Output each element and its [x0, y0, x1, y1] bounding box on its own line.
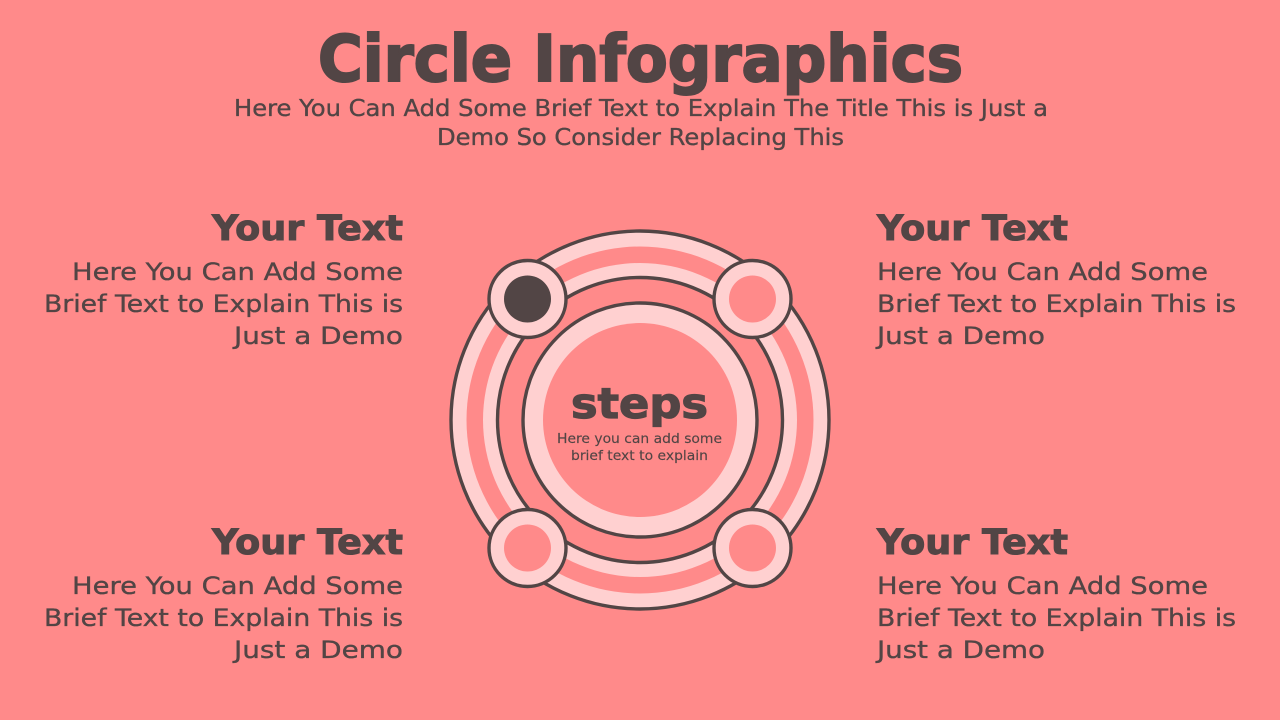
- panel: bottom right text: Just a Demo: [875, 636, 1045, 664]
- panel: top right text: Just a Demo: [875, 322, 1045, 350]
- panel: bottom left text: Here You Can Add Some: [72, 572, 403, 600]
- panel: bottom left text: Your Text: [211, 523, 403, 563]
- panel: bottom right text: [875, 523, 1236, 664]
- node: top right: [714, 260, 791, 338]
- subtitle: Here You Can Add Some Brief Text to Explain The Title This is Just a: [234, 96, 1048, 122]
- node: top left active: [489, 260, 566, 338]
- panel: top left text: Here You Can Add Some: [72, 258, 403, 286]
- panel: bottom right text: Your Text: [876, 523, 1068, 563]
- panel: top right text: [875, 209, 1236, 350]
- panel: top left text: [44, 209, 403, 350]
- center text: [557, 431, 722, 464]
- panel: bottom right text: Brief Text to Explain This is: [877, 604, 1236, 632]
- center heading: steps: [571, 379, 708, 428]
- panel: top right text: Your Text: [876, 209, 1068, 249]
- panel: bottom left text: [44, 523, 403, 664]
- panel: top right text: Here You Can Add Some: [877, 258, 1208, 286]
- center text: Here you can add some: [557, 431, 722, 447]
- node: bottom right: [714, 510, 791, 586]
- panel: bottom right text: Here You Can Add Some: [877, 572, 1208, 600]
- panel: top right text: Brief Text to Explain This is: [877, 290, 1236, 318]
- subtitle: [234, 96, 1048, 151]
- outer ring: [451, 231, 829, 609]
- center text: brief text to explain: [571, 448, 708, 464]
- panel: bottom left text: Just a Demo: [232, 636, 403, 664]
- title: Circle Infographics: [318, 23, 963, 97]
- panel: top left text: Your Text: [211, 209, 403, 249]
- node: bottom left: [489, 510, 566, 586]
- panel: top left text: Just a Demo: [232, 322, 403, 350]
- panel: top left text: Brief Text to Explain This is: [44, 290, 403, 318]
- subtitle: Demo So Consider Replacing This: [437, 125, 844, 151]
- circle diagram: [451, 231, 829, 609]
- inner ring: [523, 303, 757, 537]
- panel: bottom left text: Brief Text to Explain This is: [44, 604, 403, 632]
